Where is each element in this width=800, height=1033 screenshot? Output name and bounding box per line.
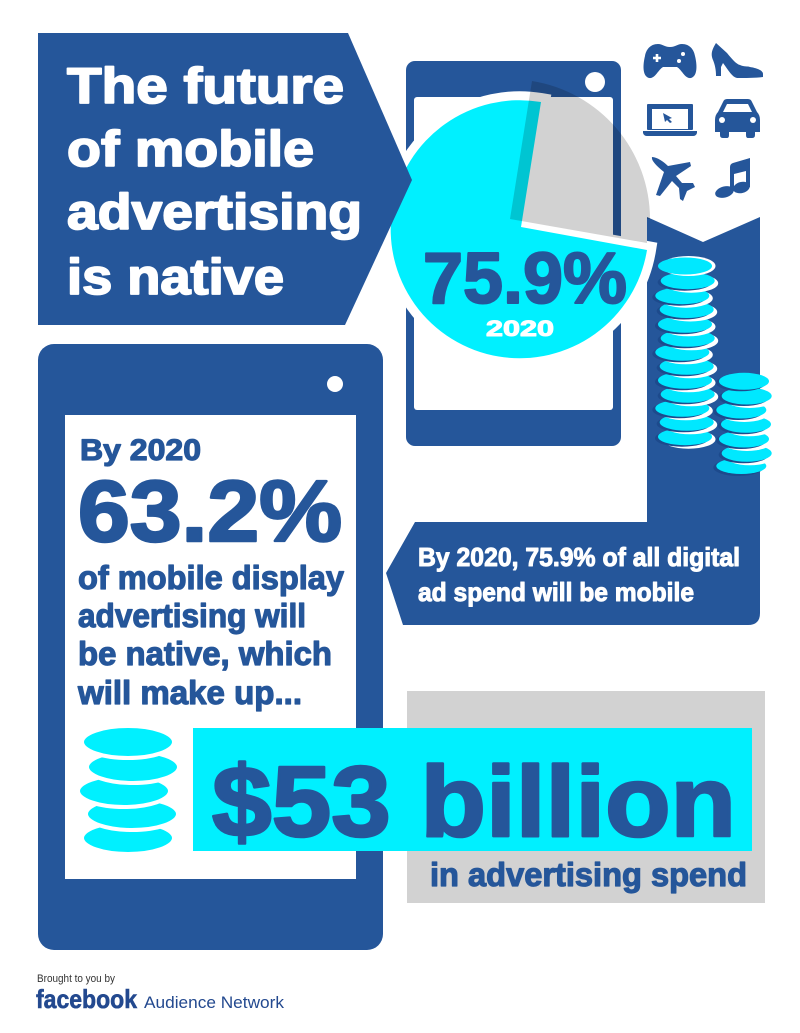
right panel: mobile ad spend: ad spend will be mobile <box>418 577 694 607</box>
pie chart: 75.9%: 75.9% <box>423 239 627 319</box>
text block: 63.2% native: be native, which <box>78 635 332 672</box>
icon: high-heel shoe <box>712 43 763 78</box>
footer credit: facebook <box>36 984 137 1014</box>
title banner: is native <box>67 249 284 305</box>
title banner: advertising <box>67 184 362 240</box>
text block: 63.2% native: of mobile display <box>78 559 345 596</box>
text block: 63.2% native: advertising will <box>78 597 306 634</box>
footer credit <box>36 973 284 1014</box>
cyan highlight: $53 billion: $53 billion <box>212 746 736 858</box>
small phone <box>406 61 621 446</box>
coin stack: large <box>78 726 179 854</box>
large phone <box>38 344 383 950</box>
title banner: of mobile <box>67 121 314 177</box>
footer credit: Audience Network <box>144 993 284 1012</box>
coin stack: short <box>713 373 775 476</box>
icon: music note <box>714 158 751 200</box>
footer credit: Brought to you by <box>37 973 115 985</box>
icon: car <box>715 99 760 138</box>
text block: 63.2% native: By 2020 <box>80 434 201 467</box>
icon: airplane <box>652 157 695 201</box>
grey backing panel <box>407 691 765 903</box>
caption: in advertising spend: in advertising spend <box>430 856 747 893</box>
right panel: mobile ad spend <box>386 217 760 625</box>
text block: 63.2% native: will make up... <box>77 674 302 711</box>
icon: game controller <box>644 44 696 78</box>
right panel: mobile ad spend: By 2020, 75.9% of all digital <box>418 542 740 572</box>
icon: laptop <box>643 104 697 136</box>
pie chart: 75.9% <box>391 81 650 358</box>
title banner <box>38 33 412 325</box>
pie chart: 75.9%: 2020 <box>486 316 554 341</box>
title banner: The future <box>67 58 344 114</box>
text block: 63.2% native <box>77 434 345 711</box>
text block: 63.2% native: 63.2% <box>78 464 342 560</box>
coin stack: tall <box>652 256 718 449</box>
